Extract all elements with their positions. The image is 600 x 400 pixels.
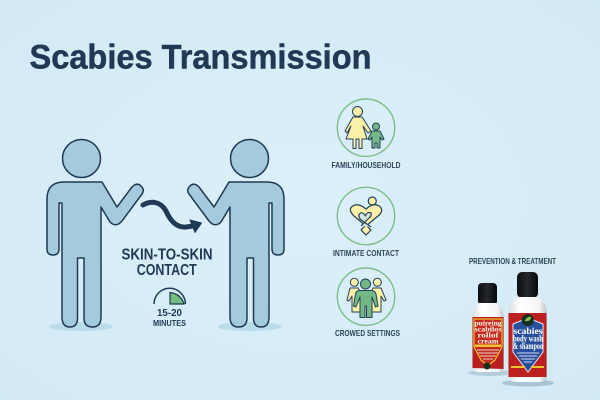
product: rollof cream bottle: scabilos (474, 324, 502, 334)
product: rollof cream bottle: puireing (474, 318, 502, 328)
title: Scabies Transmission (30, 38, 372, 76)
product: rollof cream bottle (468, 283, 512, 376)
icon: timer 15-20 minutes (153, 288, 186, 328)
arrow: transmission (143, 202, 202, 232)
product: body wash and shampoo bottle: body wash (513, 334, 543, 344)
product: body wash and shampoo bottle (502, 272, 554, 386)
icon: intimate contact (337, 187, 395, 245)
label: intimate contact: INTIMATE CONTACT (333, 248, 400, 258)
icon: timer 15-20 minutes: 15-20 (157, 308, 182, 319)
icon: timer 15-20 minutes: MINUTES (153, 318, 186, 328)
figure: right person (188, 140, 284, 331)
label: skin-to-skin contact: CONTACT (137, 262, 197, 279)
label: crowded settings: CROWED SETTINGS (335, 328, 400, 338)
label: skin-to-skin contact: SKIN-TO-SKIN (122, 246, 212, 264)
figure: left person (47, 140, 143, 331)
product: body wash and shampoo bottle: scabies (514, 326, 543, 336)
label: skin-to-skin contact (122, 246, 212, 279)
icon: family/household (337, 99, 395, 156)
product: body wash and shampoo bottle: & shampoo (513, 341, 543, 351)
label: family/household: FAMILY/HOUSEHOLD (332, 160, 400, 170)
product: rollof cream bottle: rollof (478, 330, 499, 340)
product: rollof cream bottle: cream (478, 336, 499, 346)
icon: crowded settings (337, 268, 395, 325)
label: prevention and treatment: PREVENTION & TREATMENT (469, 256, 557, 266)
